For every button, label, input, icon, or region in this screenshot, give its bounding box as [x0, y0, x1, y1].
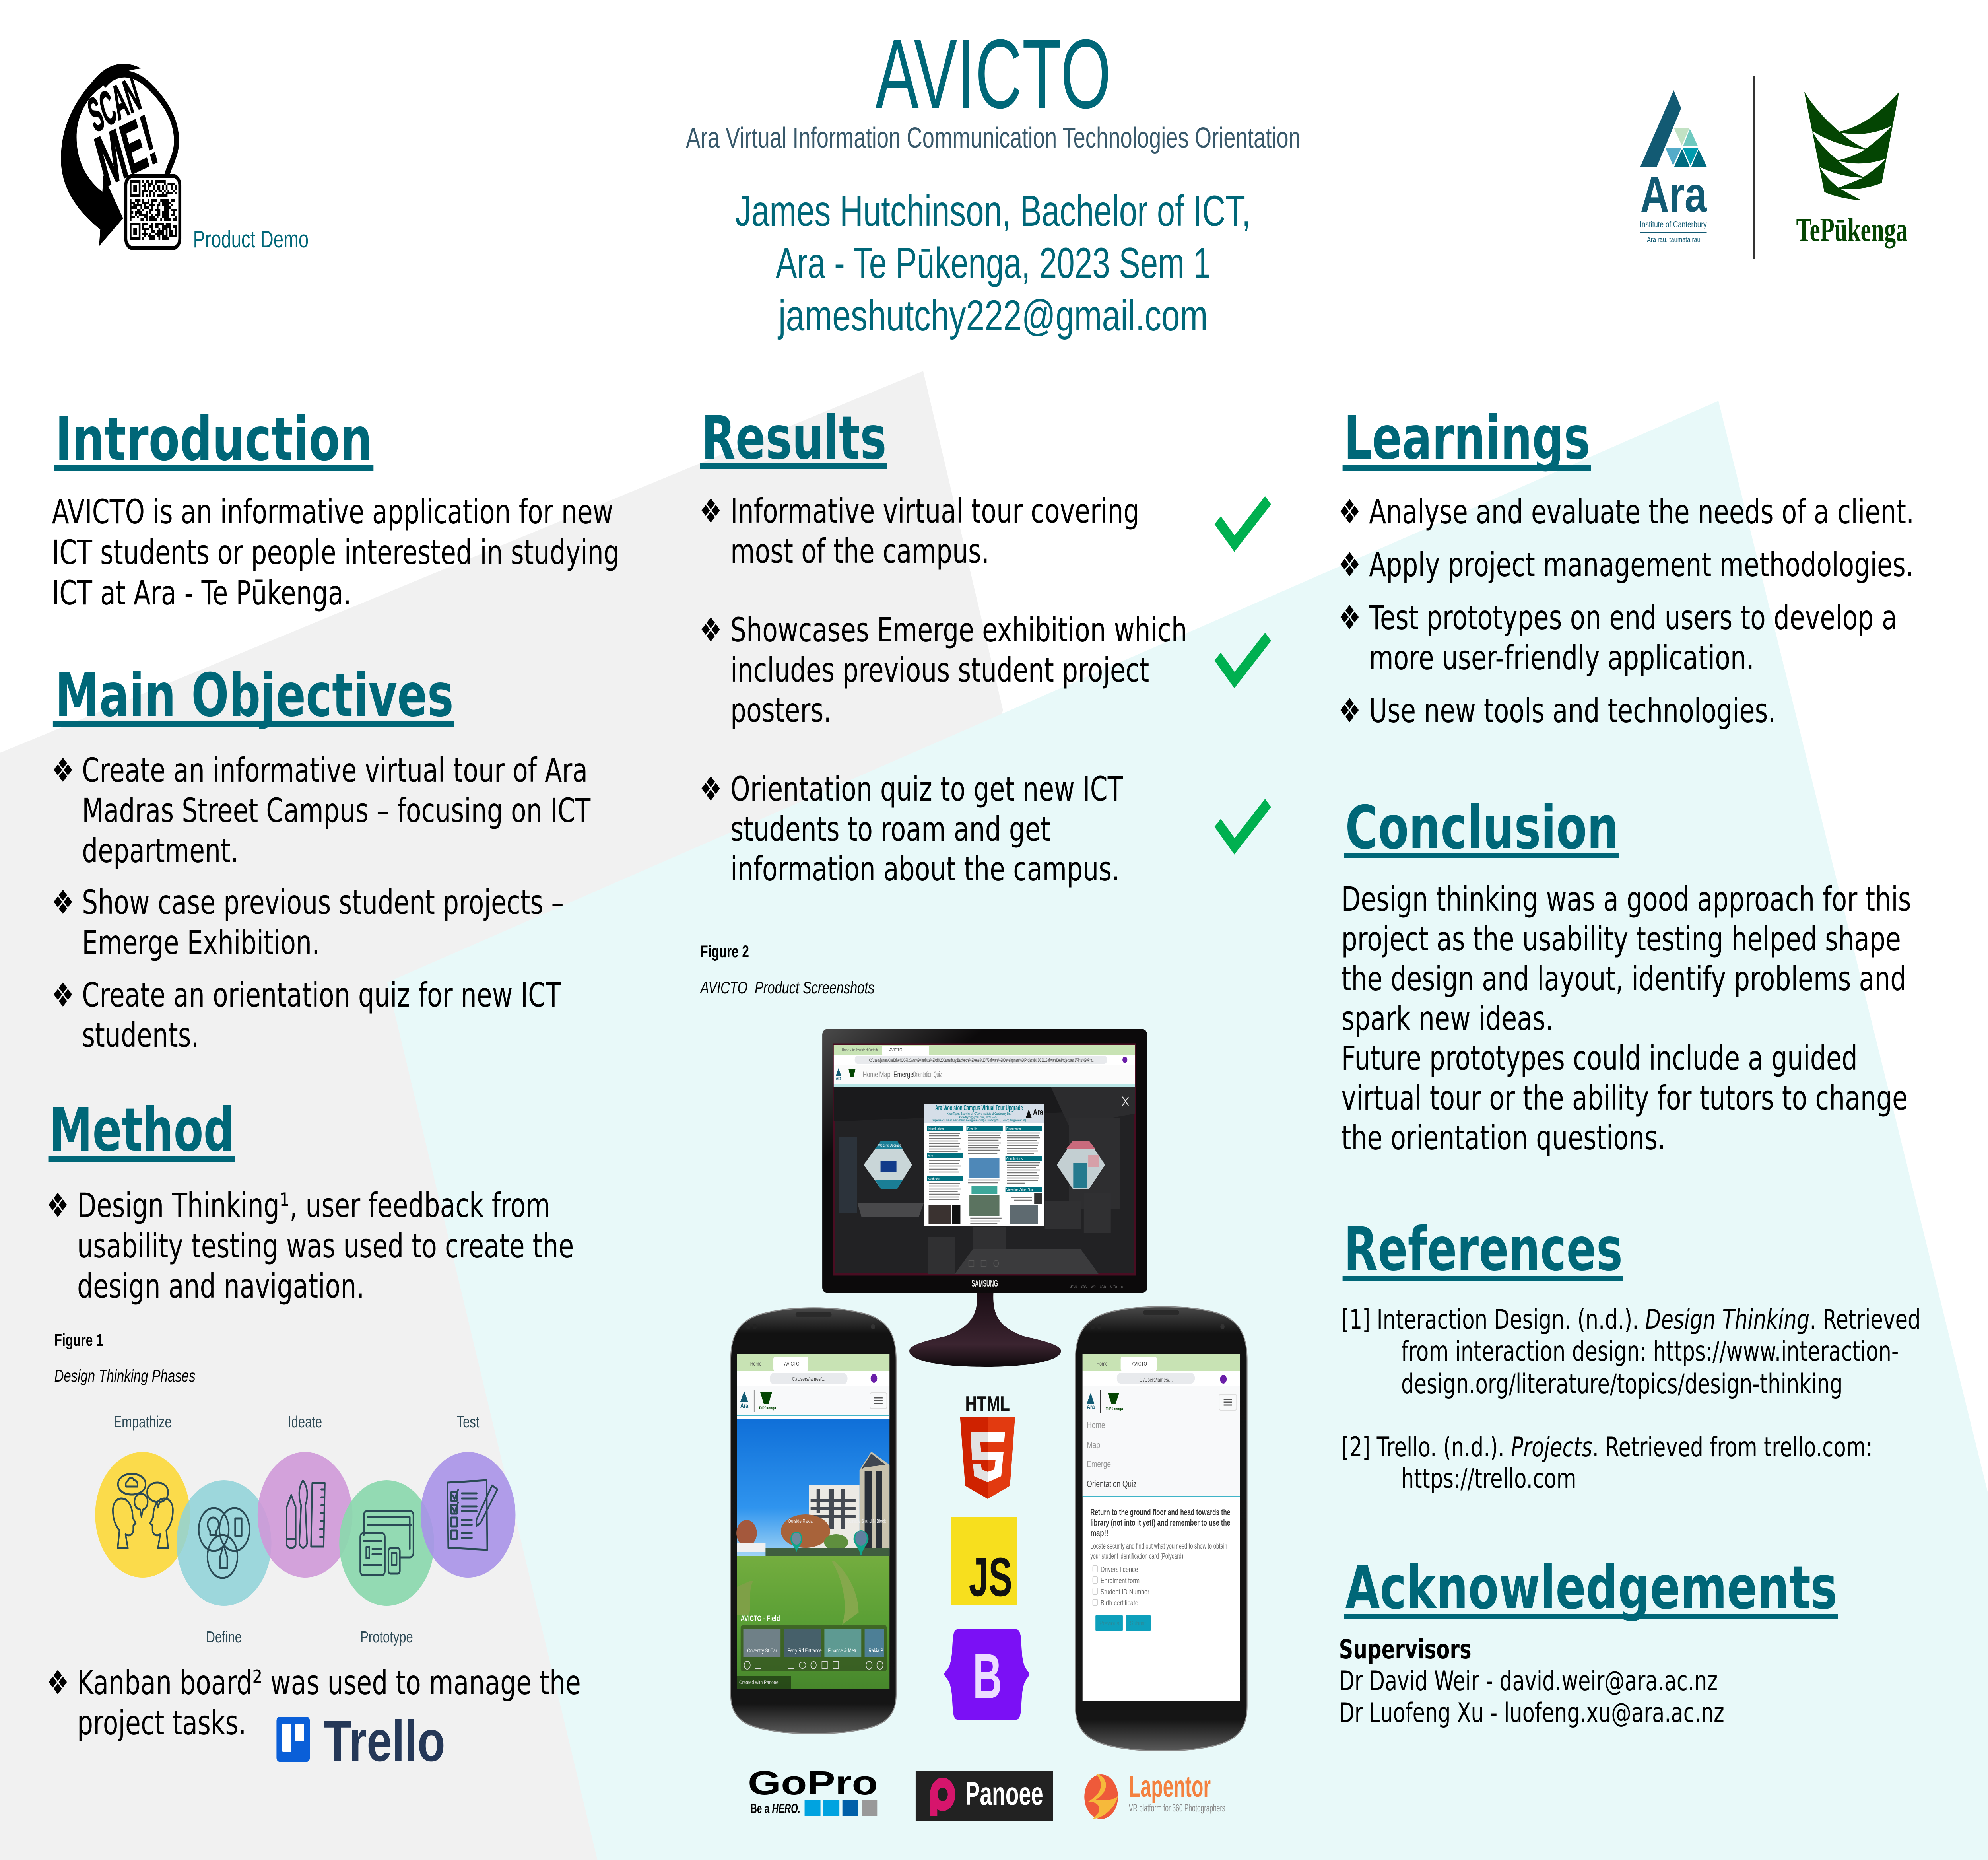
phone: browser chrome left: C:/Users/james/...	[792, 1376, 825, 1382]
list: results: Showcases Emerge exhibition which	[730, 611, 1187, 649]
diagram: design thinking phases	[95, 1413, 515, 1646]
text block: supervisors	[1339, 1634, 1724, 1729]
list: kanban: ❖	[47, 1664, 69, 1702]
list: results: ❖	[699, 611, 722, 649]
heading: Conclusion: Conclusion	[1345, 793, 1619, 863]
quiz buttons: Submit	[1130, 1619, 1146, 1627]
background: grey angled panel	[0, 371, 1003, 1860]
background: pale teal angled panel	[387, 401, 1988, 1860]
list: kanban: project tasks.	[77, 1704, 247, 1742]
text block: references: design.org/literature/topics/design-thinking	[1401, 1368, 1843, 1400]
ME text: ME!	[88, 100, 164, 201]
logo: Lapentor: Lapentor	[1129, 1770, 1211, 1804]
tour thumbnails: Created with Panoee	[739, 1679, 779, 1685]
list: learnings: ❖	[1338, 493, 1361, 531]
logo: GoPro: Be a HERO.	[751, 1802, 800, 1816]
list: objectives: ❖	[52, 883, 74, 922]
poster on screen: Ara Woolston Campus Virtual Tour Upgrade	[935, 1104, 1023, 1112]
list: objectives: ❖	[52, 751, 74, 790]
text block: references: [1] Interaction Design. (n.d.). Design Thinking. Retrieved	[1342, 1304, 1921, 1335]
text block: conclusion: the orientation questions.	[1342, 1119, 1666, 1157]
logo: JavaScript: JS	[969, 1546, 1012, 1607]
location pins	[788, 1519, 886, 1557]
logo: Ara Institute of Canterbury: Ara rau, taumata rau	[1647, 235, 1701, 244]
phone: browser chrome right: AVICTO	[1132, 1361, 1147, 1367]
quiz question: Return to the ground floor and head towards the	[1090, 1508, 1230, 1518]
list: results: Informative virtual tour covering	[730, 492, 1140, 531]
monitor buttons: MENU CD/V A/O CD/D AUTO ⏻	[1070, 1285, 1123, 1289]
heading: Introduction: Introduction	[55, 405, 372, 474]
logo: Bootstrap: B	[973, 1641, 1002, 1712]
list: results: information about the campus.	[730, 850, 1120, 888]
building	[809, 1452, 889, 1549]
screen: browser chrome: Ara	[836, 1076, 841, 1081]
poster on screen: kobe.taylor@gmail.com, 2021 Sem 1	[959, 1116, 999, 1119]
phase: test	[421, 1413, 515, 1578]
icon: trello board	[276, 1717, 310, 1762]
icon: check mark 2	[1218, 637, 1268, 680]
screen: browser chrome: Home	[863, 1070, 878, 1079]
quiz options: Drivers licence	[1101, 1565, 1138, 1574]
panel: learnings	[1338, 404, 1914, 730]
panel: conclusion	[1342, 793, 1911, 1157]
icon: lapentor flame	[1084, 1774, 1118, 1819]
poster on screen: Conclusions	[1006, 1156, 1023, 1161]
screen: browser chrome: C:/Users/james/OneDrive%20-%20Ara%20Institute%20of%20Canterbury/Bachelors%20level%207/Software%20Development%20Project/BCDE311SoftwareDevProject/ass3/Final%20Pro...	[869, 1058, 1094, 1063]
list: learnings: Analyse and evaluate the needs of a client.	[1369, 493, 1914, 531]
text block: introduction: ICT at Ara - Te Pūkenga.	[52, 574, 351, 612]
list: results: most of the campus.	[730, 532, 989, 571]
list: objectives: Create an informative virtual tour of Ara	[82, 751, 588, 790]
text block: references	[1342, 1304, 1921, 1495]
tour thumbnails: Coventry St Car...	[747, 1648, 780, 1654]
heading: Method: Method	[49, 1096, 235, 1165]
poster on screen: Results	[967, 1127, 977, 1131]
list: learnings: ❖	[1338, 546, 1361, 584]
panel: introduction	[52, 405, 619, 612]
quiz question: Locate security and find out what you need to show to obtain	[1090, 1542, 1227, 1551]
quiz buttons: Previous	[1099, 1619, 1119, 1627]
list: results: posters.	[730, 691, 831, 730]
list: objectives: Madras Street Campus – focusing on ICT	[82, 791, 591, 830]
phone: right, orientation quiz	[1076, 1307, 1247, 1751]
text block: references: from interaction design: https://www.interaction-	[1401, 1336, 1899, 1367]
text block: supervisors: Dr David Weir - david.weir@ara.ac.nz	[1339, 1666, 1718, 1697]
phone: browser chrome left	[737, 1354, 889, 1419]
side poster left	[864, 1141, 912, 1189]
list: kanban: Kanban board² was used to manage the	[77, 1664, 581, 1702]
author block: Ara - Te Pūkenga, 2023 Sem 1	[776, 239, 1211, 288]
icon: flax leaf weave	[1804, 92, 1899, 200]
logo: HTML5	[960, 1392, 1015, 1499]
phone: browser chrome right: Ara	[1087, 1403, 1095, 1411]
poster on screen	[924, 1104, 1044, 1226]
icon: panoee P	[930, 1778, 955, 1816]
list: results: ❖	[699, 492, 722, 531]
list: results: includes previous student project	[730, 651, 1149, 690]
quiz question: library (not into it yet!) and remember to use the	[1090, 1518, 1230, 1528]
list: kanban	[47, 1664, 581, 1742]
text block: introduction	[52, 493, 619, 612]
quiz options	[1093, 1565, 1149, 1607]
screen: browser chrome: AVICTO	[889, 1048, 902, 1053]
screen: browser chrome	[834, 1045, 1135, 1087]
phase: ideate: Ideate	[288, 1413, 322, 1431]
text block: conclusion: virtual tour or the ability for tutors to change	[1342, 1079, 1908, 1118]
quiz question: map!!	[1090, 1528, 1109, 1538]
screen: dark exhibition room	[834, 1087, 1135, 1274]
list: design thinking: design and navigation.	[77, 1267, 364, 1306]
list: learnings: Use new tools and technologies.	[1369, 692, 1776, 730]
phase: prototype	[339, 1480, 434, 1646]
QR code	[126, 176, 180, 248]
logo: Te Pukenga: TePūkenga	[1796, 212, 1908, 249]
list: objectives: department.	[82, 832, 239, 870]
tour thumbnails	[737, 1614, 887, 1689]
side poster left: Website Upgrade	[878, 1143, 901, 1147]
QR code scan-me badge	[61, 64, 180, 248]
list: objectives: Show case previous student projects –	[82, 883, 564, 922]
phase: define: Define	[206, 1628, 242, 1646]
icon: check mark 3	[1218, 803, 1268, 846]
monitor stand	[909, 1292, 1061, 1367]
logo: Bootstrap	[944, 1629, 1029, 1720]
monitor	[822, 1029, 1147, 1367]
tour thumbnails: Rakia P...	[868, 1648, 886, 1654]
list: objectives: Emerge Exhibition.	[82, 923, 320, 962]
text block: supervisors: Dr Luofeng Xu - luofeng.xu@ara.ac.nz	[1339, 1698, 1724, 1729]
text block: introduction: AVICTO is an informative application for new	[52, 493, 613, 531]
figure: product screenshots	[731, 1029, 1247, 1821]
list: design thinking: ❖	[47, 1186, 69, 1225]
screen: browser chrome: Home » Ara Institute of Canterb	[842, 1048, 878, 1053]
list: results: students to roam and get	[730, 810, 1050, 849]
author block: James Hutchinson, Bachelor of ICT,	[735, 187, 1251, 235]
phone: browser chrome left: TePūkenga	[759, 1406, 776, 1411]
phone: browser chrome right: TePūkenga	[1106, 1407, 1123, 1411]
list: results: Orientation quiz to get new ICT	[730, 770, 1123, 809]
list: design thinking: Design Thinking¹, user feedback from	[77, 1186, 550, 1225]
quiz buttons	[1095, 1615, 1151, 1631]
panel: main objectives	[52, 661, 591, 1055]
list: learnings: Test prototypes on end users to develop a	[1369, 599, 1897, 637]
phase: prototype: Prototype	[360, 1628, 413, 1646]
logo: Ara Institute of Canterbury: Ara	[1640, 167, 1707, 222]
heading: Learnings: Learnings	[1344, 404, 1590, 473]
text block: introduction: ICT students or people interested in studying	[52, 533, 619, 572]
phase: test: Test	[457, 1413, 480, 1431]
logo: Lapentor	[1084, 1770, 1225, 1819]
text block: references: https://trello.com	[1401, 1463, 1576, 1495]
quiz navigation menu: Emerge	[1087, 1460, 1111, 1469]
caption: figure 1: Figure 1	[54, 1331, 103, 1350]
heading: Main Objectives: Main Objectives	[55, 661, 454, 730]
phase: empathize	[95, 1413, 190, 1578]
list: design thinking	[47, 1186, 574, 1306]
list: design thinking: usability testing was used to create the	[77, 1227, 574, 1265]
phone: browser chrome left: AVICTO	[784, 1361, 800, 1367]
panel: references	[1342, 1215, 1921, 1495]
quiz options: Birth certificate	[1101, 1599, 1138, 1607]
quiz question: your student identification card (Polycard).	[1090, 1552, 1184, 1561]
caption: figure 2: Figure 2	[701, 943, 749, 961]
screen: browser chrome: Orientation Quiz	[913, 1070, 942, 1079]
icon: bubble outline	[103, 74, 177, 175]
caption: figure 2: AVICTO Product Screenshots	[700, 979, 874, 997]
logo: Lapentor: VR platform for 360 Photographers	[1129, 1802, 1225, 1814]
phone: browser chrome left: Home	[750, 1361, 761, 1367]
location pins: Outside S and N Block	[847, 1519, 886, 1524]
heading: References: References	[1344, 1215, 1623, 1284]
poster on screen: Methods	[928, 1177, 940, 1181]
icon: scan me swoosh arrow	[61, 64, 141, 246]
text block: conclusion: spark new ideas.	[1342, 999, 1553, 1038]
phone screen: tour photo	[736, 1419, 889, 1689]
text block: conclusion: Design thinking was a good approach for this	[1342, 880, 1911, 919]
list: learnings: ❖	[1338, 692, 1361, 730]
list: learnings: ❖	[1338, 599, 1361, 637]
list: objectives: ❖	[52, 976, 74, 1015]
list: learnings: Apply project management methodologies.	[1369, 546, 1914, 584]
text block: conclusion: Future prototypes could include a guided	[1342, 1039, 1858, 1078]
logo: Trello	[276, 1709, 445, 1774]
quiz navigation menu: Orientation Quiz	[1087, 1479, 1137, 1489]
logo: Trello: Trello	[324, 1709, 445, 1774]
list: objectives	[52, 751, 591, 1055]
poster on screen: Supervisors: David Weir (David.Weir@ara.ac.nz) & Luofeng Xu (Luofeng.Xu@ara.ac.nz)	[932, 1119, 1026, 1122]
quiz navigation menu: Map	[1087, 1440, 1100, 1450]
caption: figure 2	[700, 943, 874, 997]
text block: conclusion: the design and layout, identify problems and	[1342, 960, 1906, 998]
heading: Acknowledgements: Acknowledgements	[1345, 1553, 1837, 1623]
phone: browser chrome right: Home	[1096, 1361, 1108, 1367]
screen: browser chrome: Map	[879, 1070, 890, 1079]
logo: GoPro: GoPro	[748, 1764, 878, 1802]
quiz question	[1090, 1508, 1230, 1561]
phase: ideate	[258, 1413, 352, 1578]
logo: Te Pukenga	[1796, 92, 1908, 249]
quiz navigation menu: Home	[1087, 1421, 1105, 1430]
author block	[735, 187, 1251, 340]
author block: jameshutchy222@gmail.com	[777, 291, 1208, 340]
panel: method	[47, 1096, 581, 1774]
tour thumbnails: Finance & Metr...	[828, 1648, 860, 1654]
logo: Panoee	[916, 1771, 1053, 1821]
list: objectives: Create an orientation quiz for new ICT	[82, 976, 561, 1015]
title: AVICTO	[876, 19, 1111, 129]
phone: browser chrome right: C:/Users/james/...	[1139, 1377, 1173, 1383]
logo: GoPro	[748, 1764, 878, 1816]
phone: left, virtual tour	[731, 1308, 896, 1734]
logo: Panoee: Panoee	[965, 1776, 1043, 1812]
logo: Ara Institute of Canterbury: Institute of Canterbury	[1640, 220, 1707, 230]
text block: supervisors: Supervisors	[1339, 1634, 1472, 1665]
phone: browser chrome left: Ara	[740, 1402, 748, 1410]
list: learnings	[1338, 493, 1914, 730]
quiz navigation menu	[1087, 1421, 1137, 1489]
text block: conclusion	[1342, 880, 1911, 1157]
logo: Ara Institute of Canterbury	[1640, 90, 1707, 244]
phone: browser chrome right	[1083, 1354, 1240, 1496]
SCAN text: SCAN	[82, 66, 146, 142]
caption: figure 1: Design Thinking Phases	[54, 1367, 196, 1386]
heading: Results: Results	[701, 404, 887, 473]
quiz options: Student ID Number	[1101, 1588, 1149, 1596]
icon: check mark 1	[1218, 500, 1268, 544]
panel: acknowledgements	[1339, 1553, 1838, 1729]
list: results: ❖	[699, 770, 722, 809]
tour thumbnails: AVICTO - Field	[741, 1614, 780, 1623]
phase: empathize: Empathize	[114, 1413, 172, 1431]
screen: browser chrome: Emerge	[893, 1070, 913, 1079]
phase: define	[177, 1480, 272, 1646]
panel: results	[699, 404, 1268, 997]
poster on screen: Kobe Taylor, Bachelor of ICT, Ara Institute of Canterbury Ltd,	[947, 1112, 1011, 1116]
poster on screen: Aim	[928, 1154, 933, 1158]
text block: references: [2] Trello. (n.d.). Projects. Retrieved from trello.com:	[1342, 1432, 1873, 1463]
poster on screen: Introduction	[928, 1127, 944, 1131]
list: objectives: students.	[82, 1016, 199, 1055]
text block: conclusion: project as the usability testing helped shape	[1342, 920, 1901, 958]
logo: HTML5: HTML	[965, 1392, 1010, 1415]
brand: samsung: SAMSUNG	[971, 1278, 998, 1289]
caption: figure 1	[54, 1331, 196, 1386]
list: learnings: more user-friendly application.	[1369, 639, 1754, 677]
list: results	[699, 492, 1187, 888]
tour thumbnails: Ferry Rd Entrance	[788, 1648, 822, 1654]
subtitle: Ara Virtual Information Communication Technologies Orientation	[686, 122, 1301, 154]
poster on screen: Discussion	[1006, 1127, 1021, 1131]
logo: JavaScript	[951, 1517, 1017, 1607]
poster on screen: Ara	[1033, 1108, 1043, 1117]
poster on screen: View the Virtual Tour	[1006, 1188, 1034, 1192]
side poster right	[1057, 1141, 1105, 1189]
location pins: Outside Rakia	[788, 1519, 813, 1524]
QR caption: Product Demo	[193, 226, 309, 253]
quiz options: Enrolment form	[1101, 1576, 1140, 1585]
